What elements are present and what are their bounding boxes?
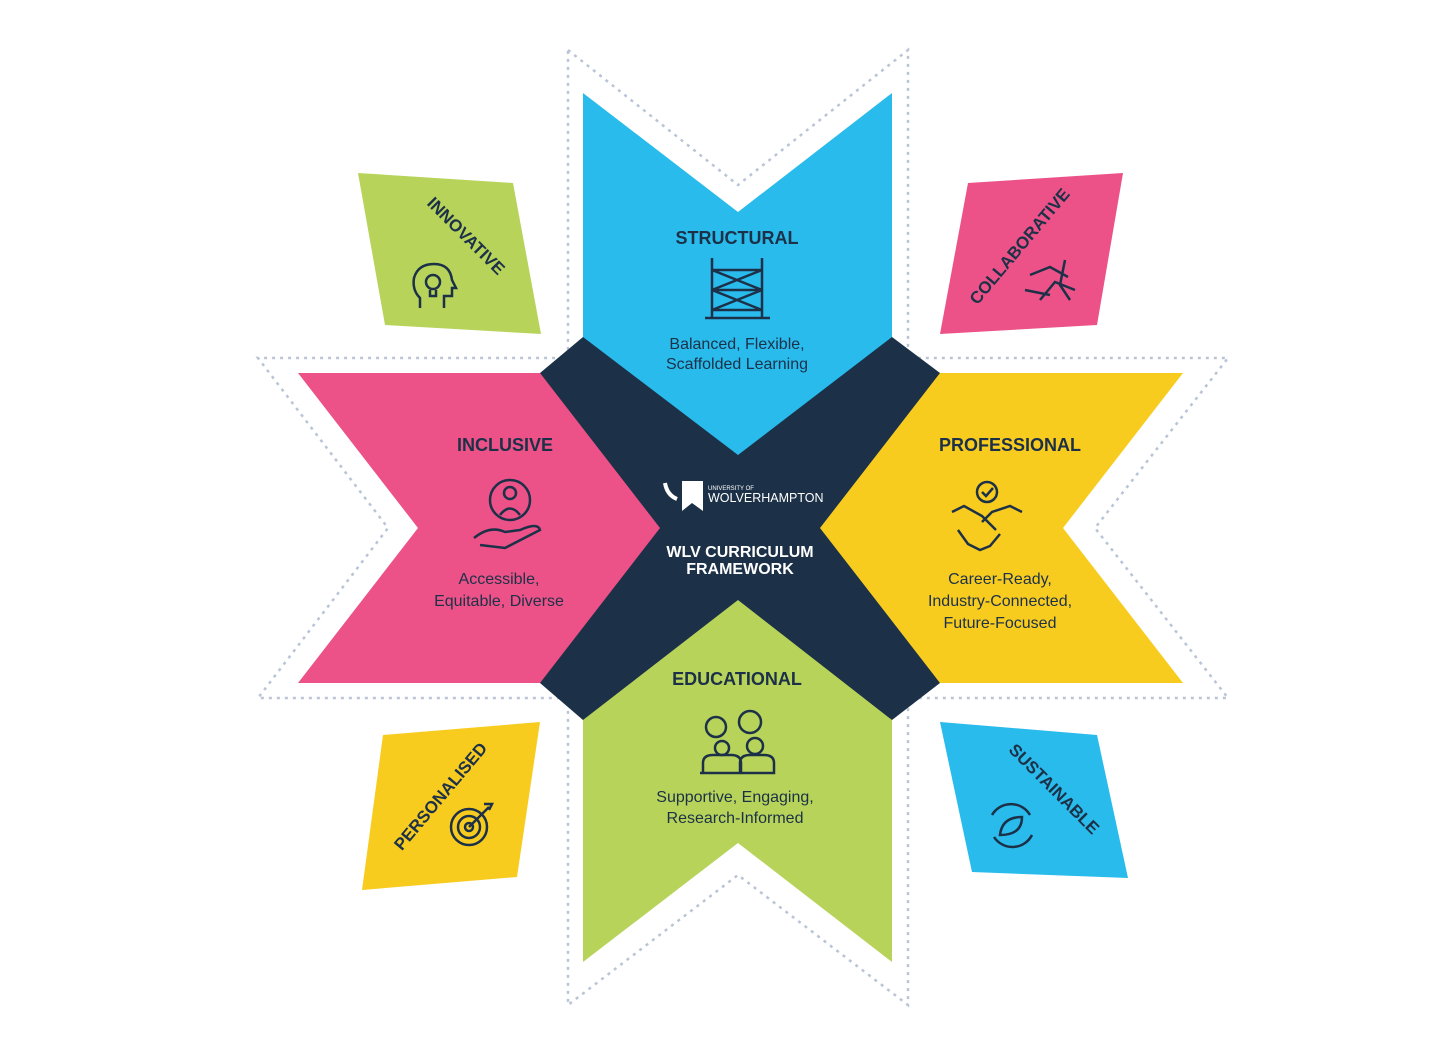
icon: people (700, 711, 774, 773)
icon: recycle leaf (992, 804, 1032, 847)
panel: personalised: PERSONALISED (390, 739, 491, 854)
icon: scaffold (705, 258, 770, 318)
panel: structural: STRUCTURAL (676, 228, 798, 248)
panel: professional: Future-Focused (944, 615, 1056, 632)
panel: educational: Research-Informed (667, 810, 803, 827)
logo: WOLVERHAMPTON (708, 491, 824, 505)
panel: inclusive: INCLUSIVE (457, 435, 553, 455)
logo: UNIVERSITY OF (708, 486, 754, 492)
icon: hands (1025, 260, 1075, 300)
panel: educational: EDUCATIONAL (672, 669, 802, 689)
panel: collaborative: COLLABORATIVE (966, 185, 1074, 308)
icon: hand with person (474, 480, 540, 548)
panel: inclusive: Accessible, (459, 571, 539, 588)
panel: professional: Career-Ready, (948, 571, 1052, 588)
title (666, 544, 814, 578)
panel: inclusive (298, 373, 660, 683)
center dark panel (540, 337, 940, 720)
panel: sustainable: SUSTAINABLE (1005, 740, 1103, 838)
panel: structural: Scaffolded Learning (666, 356, 808, 373)
panel: structural: Balanced, Flexible, (669, 336, 805, 353)
panel: professional: PROFESSIONAL (939, 435, 1081, 455)
title: WLV CURRICULUM (666, 544, 814, 561)
panel: collaborative (940, 173, 1123, 334)
panel: educational: Supportive, Engaging, (656, 789, 814, 806)
dotted star outline (258, 50, 1228, 1005)
panel: innovative (358, 173, 541, 334)
panel: innovative: INNOVATIVE (423, 194, 508, 279)
panel: sustainable (940, 722, 1128, 878)
panel: inclusive: Equitable, Diverse (434, 593, 564, 610)
icon: lightbulb head (414, 264, 456, 308)
title: FRAMEWORK (686, 561, 794, 578)
panel: professional (820, 373, 1183, 683)
panel: structural (583, 93, 892, 455)
panel: professional: Industry-Connected, (928, 593, 1072, 610)
panel: personalised (362, 722, 540, 890)
icon: target (451, 804, 492, 845)
logo (665, 481, 824, 511)
icon: handshake (952, 482, 1022, 550)
panel: educational (583, 600, 892, 962)
